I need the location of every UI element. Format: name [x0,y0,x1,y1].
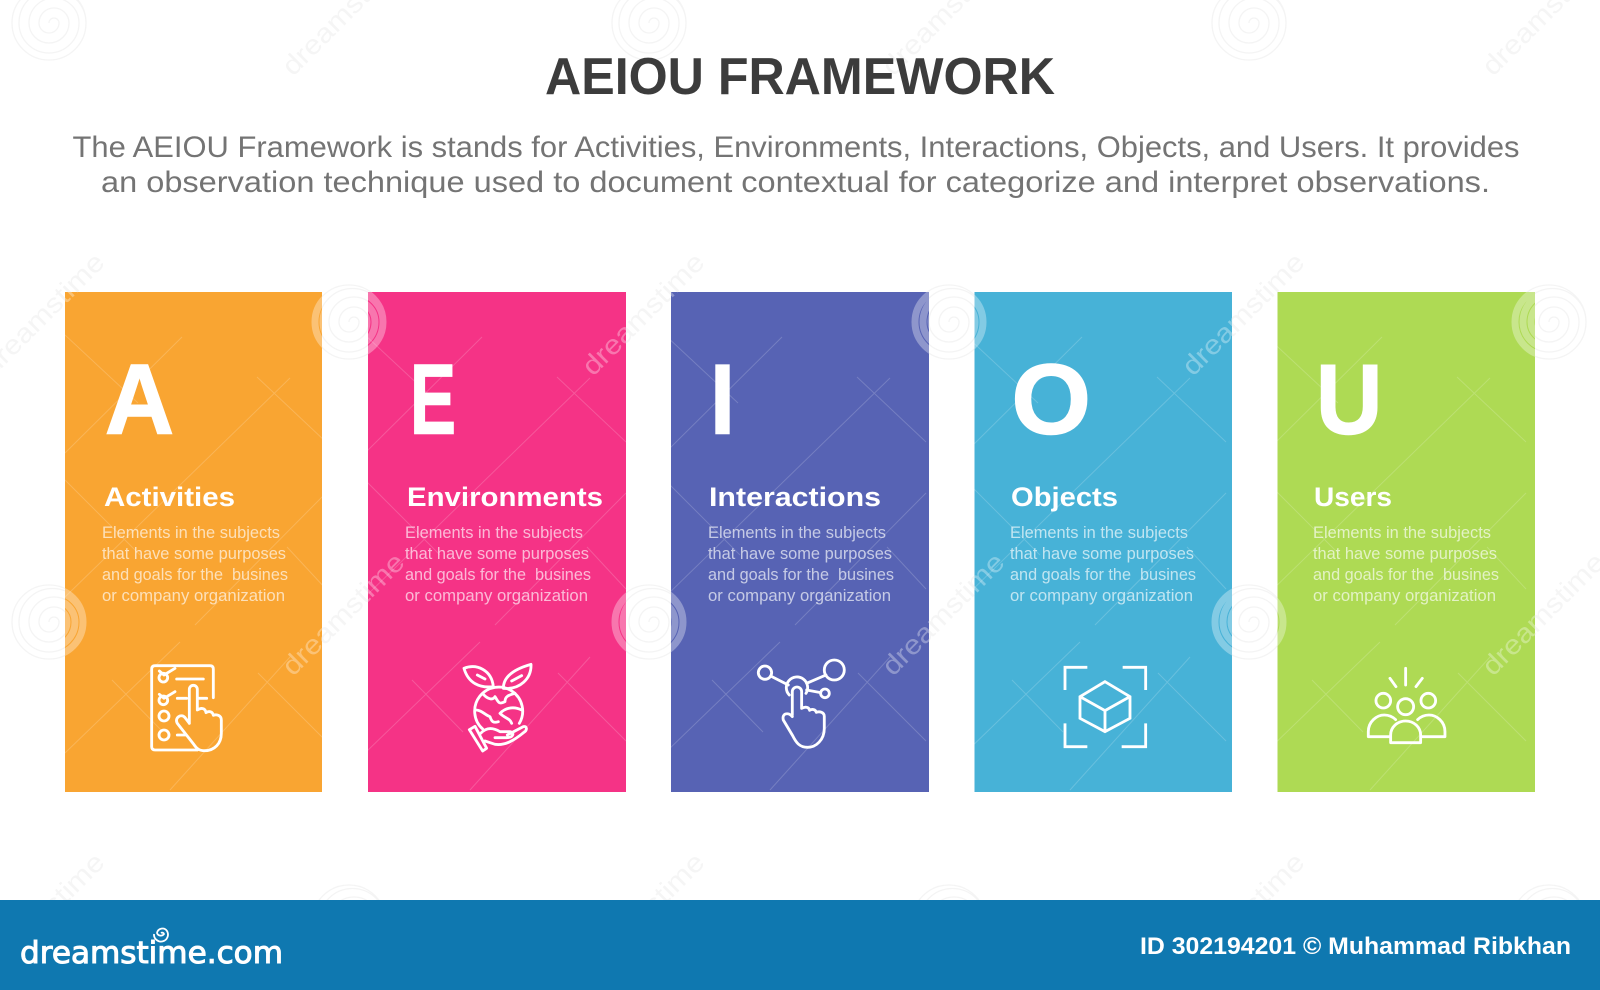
text block: Users description: or company organization [1313,587,1496,605]
icon: checklist with pointing hand [152,666,221,751]
text block: Activities description: or company organization [102,587,285,605]
subtitle text block: an observation technique used to document contextual for categorize and interpret observations. [101,166,1490,199]
watermark on white background: dreamstime [576,247,710,381]
text block: Interactions description: or company organization [708,587,891,605]
text block: Activities description: and goals for the busines [102,566,288,584]
subtitle text block [72,131,1520,199]
watermark on white background: dreamstime [876,547,1010,681]
letter I: I [710,344,735,454]
letter E: E [410,344,456,454]
watermark overlay on cards: dreamstime [1476,547,1600,681]
text block: Objects description: or company organization [1010,587,1193,605]
watermark on white background: dreamstime [576,847,710,981]
letter O: O [1012,344,1091,454]
text block: Interactions description [708,524,894,605]
letter U: U [1316,344,1382,454]
text block: Environments description [405,524,591,605]
heading: Objects: Objects [1011,482,1118,512]
text block: Environments description: Elements in the subjects [405,524,583,542]
text block: Activities description: that have some purposes [102,545,286,563]
letter A: A [105,344,174,454]
text block: Users description [1313,524,1499,605]
panel: I Interactions [671,292,929,792]
text block: Environments description: and goals for the busines [405,566,591,584]
icon: globe with leaves held in hand [464,664,531,751]
watermark on white background: dreamstime [1176,247,1310,381]
text block: Objects description: and goals for the busines [1010,566,1196,584]
panel: E Environments [368,292,626,792]
icon: cube in scan frame [1065,667,1146,747]
watermark overlay on cards [65,292,1535,790]
heading: Activities: Activities [104,482,235,512]
watermark overlay on cards: dreamstime [276,547,410,681]
text block: Interactions description: Elements in the subjects [708,524,886,542]
heading: Users: Users [1314,482,1392,512]
icon: group of users [1368,668,1445,743]
footer credit text: ID 302194201 © Muhammad Ribkhan [1140,933,1571,960]
heading: Environments: Environments [407,482,603,512]
subtitle text block: The AEIOU Framework is stands for Activities, Environments, Interactions, Objects, and Users. It provides [72,131,1520,164]
footer logo: dreamstime.com: dreamstime.com [20,936,283,971]
footer bar [0,900,1600,990]
icon: touch network [758,660,844,747]
watermark on white background: dreamstime [276,547,410,681]
text block: Users description: and goals for the busines [1313,566,1499,584]
text block: Activities description [102,524,288,605]
text block: Objects description: Elements in the subjects [1010,524,1188,542]
panel: U Users [1278,292,1535,792]
text block: Environments description: or company organization [405,587,588,605]
watermark on white background: dreamstime [1176,847,1310,981]
panel: O Objects [974,292,1232,792]
watermark overlay on cards: dreamstime [576,247,710,381]
text block: Users description: that have some purposes [1313,545,1497,563]
watermark overlay on cards: dreamstime [876,547,1010,681]
text block: Activities description: Elements in the subjects [102,524,280,542]
title: AEIOU FRAMEWORK [545,48,1055,106]
watermark overlay on cards: dreamstime [1176,247,1310,381]
text block: Interactions description: and goals for the busines [708,566,894,584]
text block: Objects description [1010,524,1196,605]
text block: Users description: Elements in the subjects [1313,524,1491,542]
text block: Objects description: that have some purposes [1010,545,1194,563]
panel: A Activities [65,292,322,792]
text block: Environments description: that have some purposes [405,545,589,563]
text block: Interactions description: that have some purposes [708,545,892,563]
heading: Interactions: Interactions [709,482,881,512]
watermark on white background: dreamstime [1476,547,1600,681]
